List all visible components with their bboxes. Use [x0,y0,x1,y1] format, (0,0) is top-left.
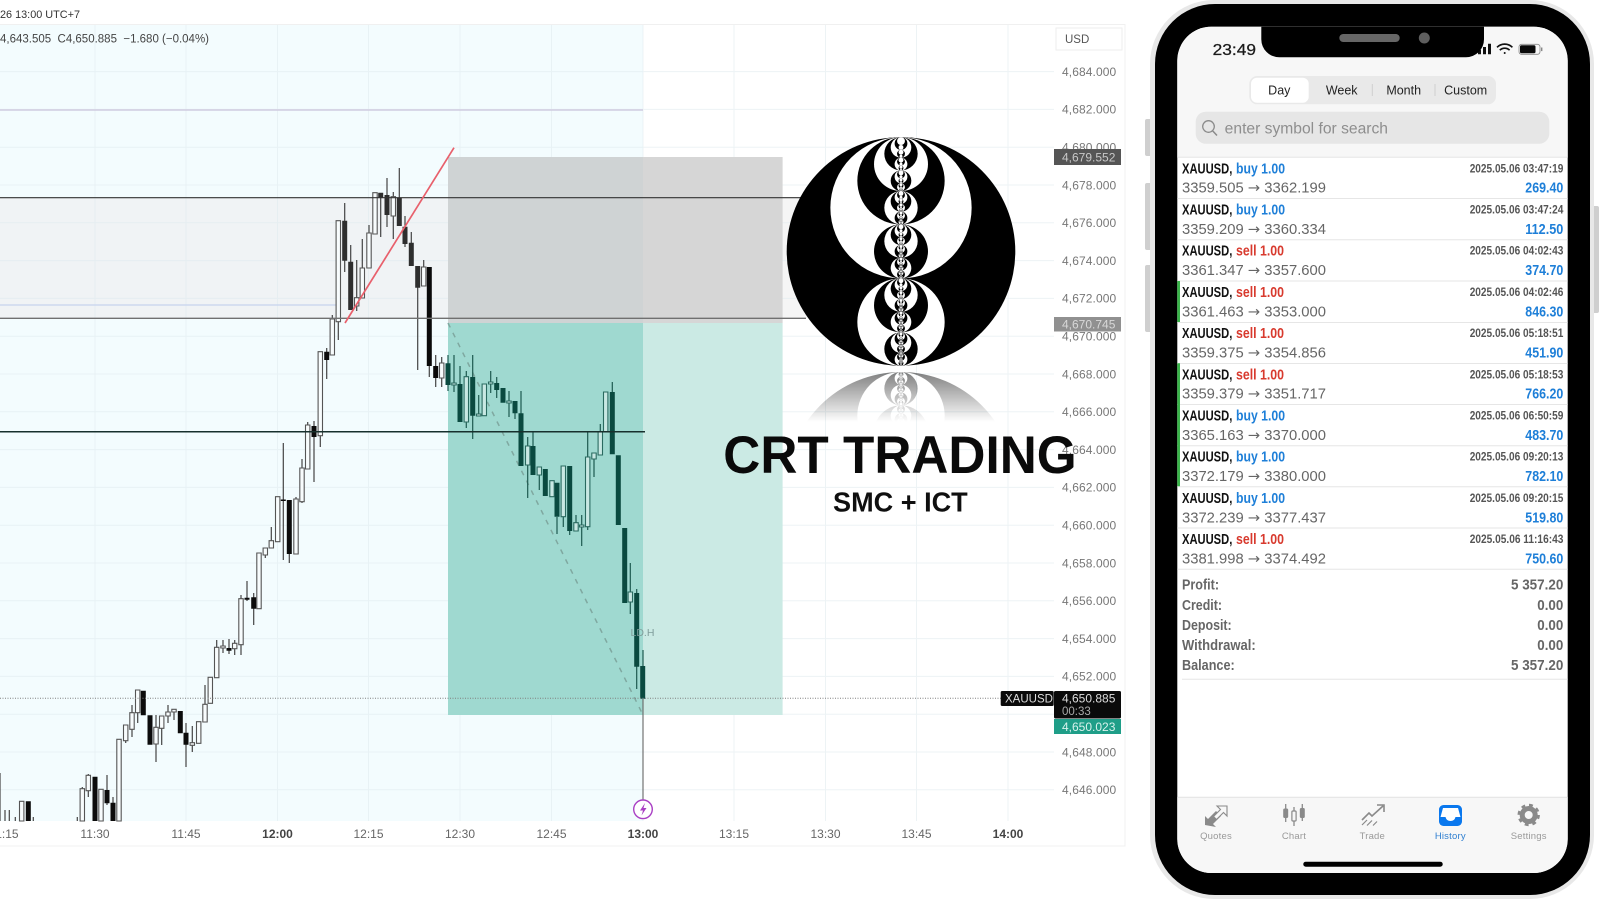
dashed diagonal [448,323,643,715]
trade row 9: XAUUSD, [1182,491,1232,507]
last price tag with countdown [1054,691,1121,718]
blue level line [0,304,336,306]
trade row 9: buy 1.00 [1236,491,1285,507]
trade row 3 [1182,244,1563,279]
account summary [1182,577,1563,674]
vertical time marker line [642,699,644,800]
account summary: 0.00 [1537,598,1563,614]
account summary: 0.00 [1537,618,1563,634]
trade row 1: XAUUSD, [1182,161,1232,177]
camera [1419,32,1430,44]
search field [1196,112,1549,144]
trade row 1 [1182,161,1563,197]
trade row 4: 3361.463 → 3353.000 [1182,304,1326,320]
price axis labels: 4,656.000 [1062,594,1117,608]
phone notch [1261,27,1484,57]
trade row 8 [1182,450,1563,485]
grey stop-loss box [448,157,783,323]
phone body [1150,0,1594,899]
segmented period control: Day [1268,84,1291,98]
trade row 5: sell 1.00 [1236,326,1284,342]
trade row 6 [1182,367,1563,403]
account summary: 5 357.20 [1511,577,1563,593]
time axis labels: 11:45 [171,827,201,841]
trade row 7: XAUUSD, [1182,408,1232,424]
icon: battery [1519,44,1542,54]
price axis labels: 4,684.000 [1062,65,1117,79]
price axis labels: 4,648.000 [1062,745,1117,759]
chart OHLC values: 4,643.505 C4,650.885 −1.680 (−0.04%) [0,34,209,46]
tab: Chart: Chart [1282,831,1306,842]
tab: History (active) [1435,805,1466,842]
panel: phone with trade history [1145,0,1599,899]
title: CRT TRADING [723,426,1077,485]
time axis labels: 12:00 [262,827,293,841]
trade row 9: 519.80 [1525,510,1563,526]
price tag: 4,679.552: 4,679.552 [1062,150,1116,164]
trade row 2: 2025.05.06 03:47:24 [1470,204,1564,216]
trade row 3: 2025.05.06 04:02:43 [1470,246,1563,258]
symbol tag: XAUUSD: XAUUSD [1005,694,1053,706]
trade row 5: XAUUSD, [1182,326,1232,342]
panel: trading chart [0,9,1125,846]
account summary: Balance: [1182,658,1235,674]
icon: signal bars [1478,44,1491,54]
chart header date: 26 13:00 UTC+7 [0,9,80,21]
trade row 6: 766.20 [1525,387,1563,403]
account summary: Profit: [1182,577,1219,593]
price axis labels: 4,682.000 [1062,103,1117,117]
account summary: 5 357.20 [1511,658,1563,674]
price axis labels: 4,658.000 [1062,556,1117,570]
speaker [1339,34,1400,42]
logo: CRT fractal emblem [786,137,1016,418]
trade row 4: 2025.05.06 04:02:46 [1470,287,1563,299]
candlesticks [0,168,643,821]
trade row 1: 2025.05.06 03:47:19 [1470,163,1563,175]
phone side buttons [1145,119,1599,332]
red trend line [345,148,454,323]
price axis labels: 4,654.000 [1062,632,1117,646]
time axis labels: 12:30 [445,827,475,841]
price axis labels: 4,666.000 [1062,405,1117,419]
trade row 7: 3365.163 → 3370.000 [1182,428,1326,444]
tab: Trade [1360,805,1385,842]
trade row 8: 782.10 [1525,469,1563,485]
account summary: Deposit: [1182,618,1232,634]
tab: Quotes [1200,806,1232,842]
trade row 4: XAUUSD, [1182,285,1232,301]
account summary: Credit: [1182,598,1222,614]
trade row 7: buy 1.00 [1236,408,1285,424]
price axis labels: 4,664.000 [1062,443,1117,457]
tab: History (active): History [1435,831,1466,842]
trade row 5: 451.90 [1525,346,1563,362]
trade row 7 [1182,408,1563,444]
time axis labels: 13:00 [628,827,659,841]
trade row 10: 750.60 [1525,552,1563,568]
segmented period control [1249,76,1496,104]
trade row 2: XAUUSD, [1182,202,1232,218]
trade row 8: XAUUSD, [1182,450,1232,466]
label: LD.H: LD.H [630,627,654,639]
segmented period control: Week [1326,84,1358,98]
price axis labels: 4,662.000 [1062,481,1117,495]
trade row 2 [1182,202,1564,238]
trade row 9: 2025.05.06 09:20:15 [1470,493,1564,505]
trade row 5 [1182,326,1564,362]
price axis labels: 4,670.000 [1062,330,1117,344]
subtitle: SMC + ICT [833,487,968,518]
price tag: 4,679.552 [1054,149,1121,165]
purple level line [0,109,643,111]
time axis labels: 14:00 [993,827,1024,841]
last price tag with countdown: 4,650.885 [1062,692,1116,706]
trade row 6: XAUUSD, [1182,367,1232,383]
trade row 10: XAUUSD, [1182,532,1232,548]
trade row 7: 483.70 [1525,428,1563,444]
trade row 3: 374.70 [1525,263,1563,279]
row separators [1177,157,1568,679]
time axis labels [0,827,1024,841]
trade row 10: 2025.05.06 11:16:43 [1470,534,1563,546]
segmented period control: Month [1386,84,1421,98]
trade row 6: 3359.379 → 3351.717 [1182,387,1326,403]
trade row 1: 269.40 [1525,181,1563,197]
trade row 8: buy 1.00 [1236,450,1285,466]
middle black level line [0,431,645,433]
lower grey level line [0,317,806,319]
price axis labels [1062,65,1117,797]
price axis labels: 4,660.000 [1062,518,1117,532]
icon: wifi [1497,44,1512,54]
account summary: Withdrawal: [1182,638,1256,654]
trade row 2: 3359.209 → 3360.334 [1182,222,1326,238]
trade row 3: XAUUSD, [1182,244,1232,260]
currency label: USD [1065,34,1089,46]
trade row 2: 112.50 [1525,222,1563,238]
price axis labels: 4,652.000 [1062,670,1117,684]
time axis labels: 12:45 [536,827,567,841]
logo reflection [810,372,992,418]
price axis labels: 4,676.000 [1062,216,1117,230]
trade row 4: 846.30 [1525,304,1563,320]
price axis labels: 4,678.000 [1062,178,1117,192]
trade row 1: buy 1.00 [1236,161,1285,177]
home indicator [1303,862,1443,867]
upper black level line [0,197,806,199]
search field: enter symbol for search [1225,120,1388,137]
trade row 9: 3372.239 → 3377.437 [1182,510,1326,526]
trade row 3: 3361.347 → 3357.600 [1182,263,1326,279]
price axis labels: 4,680.000 [1062,140,1117,154]
currency label [1056,28,1122,50]
teal take-profit box [448,323,783,715]
price axis labels: 4,674.000 [1062,254,1117,268]
tab: Trade: Trade [1360,831,1385,842]
trade row 10: 3381.998 → 3374.492 [1182,552,1326,568]
tab: Settings [1511,805,1547,842]
trade row 6: 2025.05.06 05:18:53 [1470,369,1563,381]
time axis labels: 13:45 [901,827,932,841]
bottom tab bar [1177,797,1568,873]
price tag: 4,670.745: 4,670.745 [1062,318,1116,332]
trade row 6: sell 1.00 [1236,367,1284,383]
trade row 10: sell 1.00 [1236,532,1284,548]
trade row 10 [1182,532,1563,568]
trade row 9 [1182,491,1564,526]
trade row 8: 3372.179 → 3380.000 [1182,469,1326,485]
time axis labels: 13:15 [719,827,749,841]
segmented period control: Custom [1444,84,1487,98]
trade row 8: 2025.05.06 09:20:13 [1470,452,1563,464]
last price tag with countdown: 00:33 [1062,706,1091,718]
status bar time: 23:49 [1213,42,1256,59]
tab: Settings: Settings [1511,831,1547,842]
trade row 4: sell 1.00 [1236,285,1284,301]
price axis labels: 4,672.000 [1062,292,1117,306]
price tag: 4,650.023: 4,650.023 [1062,720,1116,734]
trade row 1: 3359.505 → 3362.199 [1182,181,1326,197]
trade row 3: sell 1.00 [1236,244,1284,260]
trade row 7: 2025.05.06 06:50:59 [1470,410,1563,422]
account summary: 0.00 [1537,638,1563,654]
dotted last-price line [0,697,1001,699]
price axis labels: 4,668.000 [1062,367,1117,381]
tab: Quotes: Quotes [1200,831,1232,842]
price axis labels: 4,646.000 [1062,783,1117,797]
trade row 4 [1182,285,1563,320]
tab: Chart [1282,804,1306,842]
trade row 2: buy 1.00 [1236,202,1285,218]
time axis labels: 13:30 [810,827,841,841]
trade row 5: 2025.05.06 05:18:51 [1470,328,1564,340]
time axis labels: 12:15 [353,827,384,841]
icon: lightning marker [634,800,652,819]
trade row 5: 3359.375 → 3354.856 [1182,346,1326,362]
time axis labels: 11:30 [80,827,110,841]
green highlights [1177,281,1180,486]
